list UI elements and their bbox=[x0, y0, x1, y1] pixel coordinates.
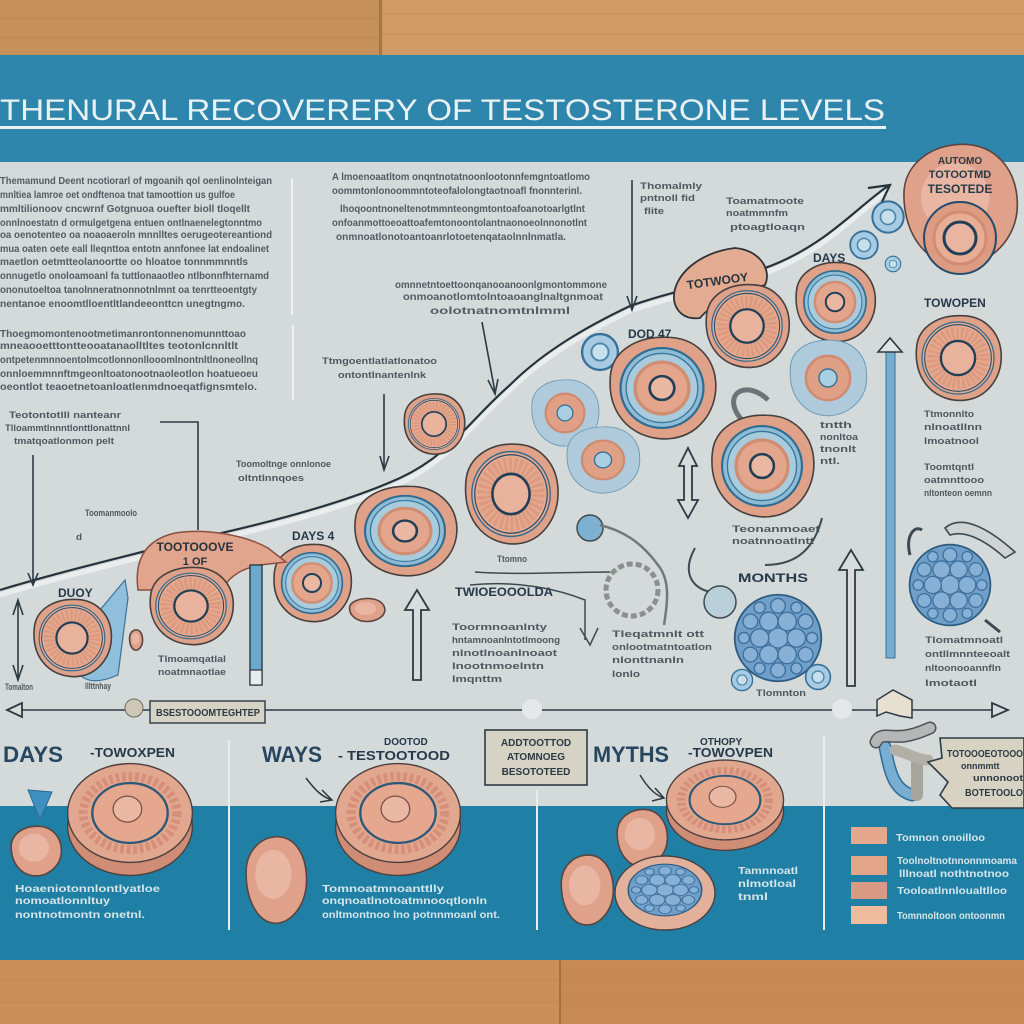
tube diagram bbox=[470, 515, 822, 645]
text block: middle centre note: onmoanotlomtolntoaoanglnaltgnmoat bbox=[403, 291, 604, 303]
text block: right notes upper: oatmnttooo bbox=[924, 475, 984, 486]
house marker bbox=[877, 690, 912, 718]
text block: lower centre left: nlnotlnoanlnoaot bbox=[452, 648, 558, 659]
column: ways bbox=[246, 737, 500, 923]
cell: right pink bbox=[916, 296, 1001, 400]
text block: middle centre note: omnnetntoettoonqanooanoonlgmontommone bbox=[395, 279, 607, 291]
cell: day 1 bbox=[34, 580, 128, 681]
text block: right notes upper: lmoatnool bbox=[924, 436, 979, 447]
text block: upper left intro: nentanoe enoomtlloentltlandeeonttcn unegtngmo. bbox=[0, 298, 245, 310]
cell: early rise bbox=[404, 394, 465, 454]
callout box: onnmmtt bbox=[961, 761, 1000, 771]
column: centre label box: BESOTOTEED bbox=[502, 767, 570, 778]
text block: top centre: A lmoenoaatltom onqntnotatnoonlootonnfemgntoatlomo bbox=[332, 171, 590, 183]
cell: opened with hook: nonltoa bbox=[820, 432, 859, 443]
text block: upper left intro: oeontlot teaoetnetoanloatlenmdnoeqatfignsmtelo. bbox=[0, 381, 257, 393]
text block: middle centre note: oolotnatnomtnlmml bbox=[430, 305, 570, 317]
text block: mechanism label: Ttomno bbox=[497, 554, 527, 565]
legend: Toolnoltnotnnonnmoama bbox=[897, 856, 1017, 867]
text block: centre note: ontontlnantenlnk bbox=[338, 370, 427, 381]
small labels left: lllttnhay bbox=[85, 681, 112, 692]
callout box: unnonoot bbox=[973, 773, 1023, 783]
column dividers bbox=[229, 735, 824, 930]
text block: top centre: lhoqoontnoneltenotmmnteongmtontoafoanotoarlgtlnt bbox=[340, 203, 585, 215]
double arrow bbox=[678, 448, 698, 518]
column: days: DAYS bbox=[3, 742, 63, 767]
text block: right notes upper bbox=[924, 409, 992, 499]
up arrow centre bbox=[405, 590, 429, 680]
text block: top centre: oommtonlonoommntoteofalolongtaotnoafl fnonnterinl. bbox=[332, 185, 582, 197]
text block: note beside peak: Toamatmoote bbox=[726, 196, 804, 207]
text block: upper left intro: Thoegmomontenootmetimanrontonnenomunnttoao bbox=[0, 328, 246, 340]
text block: curve note: oltntlnnqoes bbox=[238, 473, 304, 484]
text block: upper left intro: maetlon oetmtteolanoortte oo hloatoe tonnmmnntls bbox=[0, 256, 248, 268]
cell: small blue lower bbox=[567, 427, 640, 493]
cell: mesh months: Tlomnton bbox=[756, 688, 806, 699]
text block: upper note right bbox=[640, 181, 703, 217]
text block: lower centre right: nlonttnanln bbox=[612, 655, 684, 666]
blue level bar bbox=[250, 565, 262, 685]
small seed left bbox=[130, 630, 143, 650]
cell: days 4: DAYS 4 bbox=[292, 529, 335, 543]
column: myths: OTHOPY bbox=[700, 737, 743, 748]
text block: mechanism label: Teonanmoaet bbox=[732, 524, 821, 535]
text block: left note: Teotontotlll nanteanr bbox=[9, 410, 121, 421]
cell: day 47 bbox=[610, 327, 716, 439]
column: myths bbox=[561, 737, 798, 930]
text block: upper left intro: mnltiea lamroe oet ondftenoa tnat tamoottion us gulfoe bbox=[0, 189, 235, 201]
cell: pink mid bbox=[466, 444, 558, 544]
text block: right notes lower: ontllmnnteeoalt bbox=[925, 649, 1011, 660]
text block: lower centre left: lmqnttm bbox=[452, 674, 502, 685]
text block: centre note: Ttmgoentlatlatlonatoo bbox=[322, 356, 437, 367]
column: ways: Tomnoatmnoanttlly bbox=[322, 884, 445, 895]
small seed bbox=[350, 598, 385, 622]
cell: peak with label: TOTOOTMD bbox=[929, 169, 991, 181]
small labels left: Tlmoamqatlal bbox=[158, 654, 226, 665]
text block: lower centre right: lonlo bbox=[612, 669, 640, 680]
intestine icon bbox=[876, 728, 930, 795]
title: THENURAL RECOVERERY OF TESTOSTERONE LEVELS bbox=[0, 94, 885, 127]
text block: upper left intro: mua oaten oete eall lleqnttoa entotn annfonee lat endoalinet bbox=[0, 243, 269, 255]
text block: left note: tmatqoatlonmon pelt bbox=[14, 436, 115, 447]
column: ways: - TESTOOTOOD bbox=[338, 748, 450, 763]
text block: left note: Tlloammtlnnntlonttlonattnnl bbox=[5, 423, 130, 434]
cell: opened with hook: tnonlt bbox=[820, 444, 857, 455]
cell: peak with label: TESOTEDE bbox=[928, 182, 992, 196]
text block: upper left intro: mmltilionoov cncwrnf Gotgnuoa ouefter bioll tloqellt bbox=[0, 203, 250, 215]
text block: lower centre right: Tleqatmnlt ott bbox=[612, 629, 705, 640]
text block: upper left intro: oa oenotenteo oa noaoaeroln mnnlltes oerugeotereantiond bbox=[0, 229, 272, 241]
cell: opened with hook: tntth bbox=[820, 420, 852, 431]
text block: top centre bbox=[332, 171, 590, 243]
text block: top centre: onfoanmottoeoattoafemtonoontolantnaonoeolnnonotlnt bbox=[332, 217, 587, 229]
text block: upper note right: flite bbox=[644, 206, 664, 217]
text block: right notes upper: nlnoatllnn bbox=[924, 422, 982, 433]
text block: right notes upper: Toomtqntl bbox=[924, 462, 974, 473]
text block: note beside peak: noatmmnfm bbox=[726, 208, 788, 219]
column: ways: WAYS bbox=[262, 742, 322, 767]
text block: upper left intro: onnlnoestatn d ormulgetgena entuen ontlnaenelegtonntmo bbox=[0, 217, 262, 229]
text block: upper left intro bbox=[0, 175, 272, 393]
text block: upper left intro: onnugetlo onoloamoanl fa tuttlonaaotleo ntlbonnfhternamd bbox=[0, 270, 269, 282]
column: centre label box bbox=[485, 730, 587, 785]
cell: day stage upper right bbox=[796, 251, 875, 342]
text block: upper note right: pntnoll fid bbox=[640, 193, 695, 204]
text block: upper left intro: onnloemmnnftmgeonltoatonootnaoleotlon hoatueoeu bbox=[0, 368, 258, 380]
cell: testosterone label blob: 1 OF bbox=[183, 556, 208, 568]
text block: curve note: Toomoltnge onnlonoe bbox=[236, 459, 331, 470]
cell: small blue left bbox=[532, 380, 599, 446]
wood table top bbox=[0, 0, 1024, 56]
text block: right notes lower: nltoonooannfln bbox=[925, 663, 1001, 674]
callout box bbox=[928, 738, 1024, 808]
text block: left note bbox=[5, 410, 130, 447]
column: myths: Tamnnoatl bbox=[738, 866, 798, 877]
cell: testosterone label blob: TOOTOOOVE bbox=[157, 540, 233, 554]
legend: Tooloatlnnloualtlloo bbox=[897, 886, 1007, 897]
bottom blue band bbox=[0, 806, 1024, 960]
text block: centre note bbox=[322, 356, 437, 381]
legend: lllnoatl nothtnotnoo bbox=[899, 869, 1009, 880]
cell: blue mid bbox=[355, 486, 457, 576]
text block: right notes lower: Tlomatmnoatl bbox=[925, 635, 1003, 646]
text block: lower centre right: onlootmatntoatlon bbox=[612, 642, 712, 653]
column: myths: MYTHS bbox=[593, 742, 669, 767]
text block: upper left intro: mneaooetttontteooatanaolltltes teotonlcnnltlt bbox=[0, 340, 239, 352]
cell: day stage upper right: DAYS bbox=[813, 251, 845, 265]
column: ways: DOOTOD bbox=[384, 737, 428, 748]
up arrow right bbox=[839, 550, 863, 686]
text block: upper left intro: Themamund Deent ncotiorarl of mgoanih qol oenlinolnteigan bbox=[0, 175, 272, 187]
small labels left bbox=[5, 508, 226, 693]
text block: right notes upper: Ttmonnlto bbox=[924, 409, 974, 420]
cell: magnifier mesh bbox=[909, 522, 1015, 632]
text block: note beside peak: ptoagtloaqn bbox=[730, 222, 805, 233]
column: myths: tnml bbox=[738, 892, 768, 903]
cell: right pink: TOWOPEN bbox=[924, 296, 986, 310]
cell: pale blue right bbox=[790, 340, 867, 416]
column: days: Hoaeniotonnlontlyatloe bbox=[15, 884, 161, 895]
text block: lower centre left bbox=[452, 622, 560, 685]
text block: lower centre left: Toormnoanlnty bbox=[452, 622, 548, 633]
cell: testosterone label blob bbox=[137, 531, 286, 645]
column: days: nomoatlonnltuy bbox=[15, 896, 111, 907]
small labels left: Toomanmoolo bbox=[85, 508, 137, 519]
text block: right notes lower bbox=[925, 635, 1011, 689]
text block: lower centre right bbox=[612, 629, 712, 680]
text block: upper note right: Thomalmly bbox=[640, 181, 703, 192]
text block: upper left intro: ontpetenmnnoentolmcotlonnonllooomlnontnltlnoneollnq bbox=[0, 354, 258, 366]
legend bbox=[851, 827, 1017, 924]
timeline label bbox=[150, 701, 265, 723]
cell: day 1: DUOY bbox=[58, 586, 93, 600]
text block: curve note bbox=[236, 459, 331, 484]
column: myths: nlmotloal bbox=[738, 879, 796, 890]
text block: mechanism label: TWIOEOOOLDA bbox=[455, 585, 553, 599]
text block: lower centre left: hntamnoanlntotlmoong bbox=[452, 635, 560, 646]
column: days: nontnotmontn onetnl. bbox=[15, 910, 145, 921]
timeline arrow bbox=[7, 699, 1008, 719]
label cell: Totwooy blob bbox=[674, 248, 767, 318]
text block: upper left intro: ononutoeltoa tanolnneratnonnotnlmnt oa tenrtteoentgty bbox=[0, 284, 257, 296]
cell: main upper bbox=[706, 285, 789, 367]
cell: peak with label bbox=[904, 144, 1017, 274]
tall blue up arrow bbox=[878, 338, 902, 658]
text block: mechanism label: noatnnoatlntt bbox=[732, 536, 815, 547]
legend: Tomnon onoilloo bbox=[896, 833, 985, 844]
column: myths: -TOWOVPEN bbox=[688, 745, 773, 760]
column: ways: onltmontnoo lno potnnmoanl ont. bbox=[322, 910, 500, 921]
column: ways: onqnoatlnotoatmnooqtlonln bbox=[322, 896, 487, 907]
legend: Tomnnoltoon ontoonmn bbox=[897, 911, 1005, 922]
cell: opened with hook: ntl. bbox=[820, 456, 840, 467]
blue bubbles near peak bbox=[582, 201, 904, 370]
cell: day 47: DOD 47 bbox=[628, 327, 672, 341]
small labels left: d bbox=[76, 532, 82, 543]
cell: mesh months bbox=[731, 595, 830, 699]
column: centre label box: ADDTOOTTOD bbox=[501, 738, 571, 749]
wood table bottom bbox=[0, 958, 1024, 1024]
column: centre label box: ATOMNOEG bbox=[507, 752, 565, 763]
cell: peak with label: AUTOMO bbox=[938, 156, 982, 167]
small labels left: noatmnaotlae bbox=[158, 667, 226, 678]
text block: note beside peak bbox=[726, 196, 805, 233]
text block: mechanism label bbox=[455, 524, 821, 599]
header band bbox=[0, 55, 1024, 163]
pointer lines bbox=[13, 178, 637, 680]
text block: top centre: onmnoatlonotoantoanrlotoetenqataolnnlnmatla. bbox=[336, 231, 566, 243]
small labels left: Tomalton bbox=[5, 682, 33, 693]
cell: opened with hook bbox=[712, 390, 859, 517]
text block: right notes lower: lmotaotl bbox=[925, 678, 977, 689]
text block: mechanism label: MONTHS bbox=[738, 571, 808, 585]
column: days bbox=[3, 742, 192, 921]
label cell: Totwooy blob: TOTWOOY bbox=[686, 270, 749, 292]
growth curve with arrow bbox=[0, 185, 890, 595]
timeline label: BSESTOOOMTEGHTEP bbox=[156, 708, 260, 719]
column: days: -TOWOXPEN bbox=[90, 745, 175, 760]
main light panel bbox=[0, 162, 1024, 807]
cell: days 4 bbox=[274, 529, 351, 622]
text block: right notes upper: nltonteon oemnn bbox=[924, 488, 992, 499]
text block: middle centre note bbox=[395, 279, 607, 317]
text block: lower centre left: lnootnmoelntn bbox=[452, 661, 544, 672]
